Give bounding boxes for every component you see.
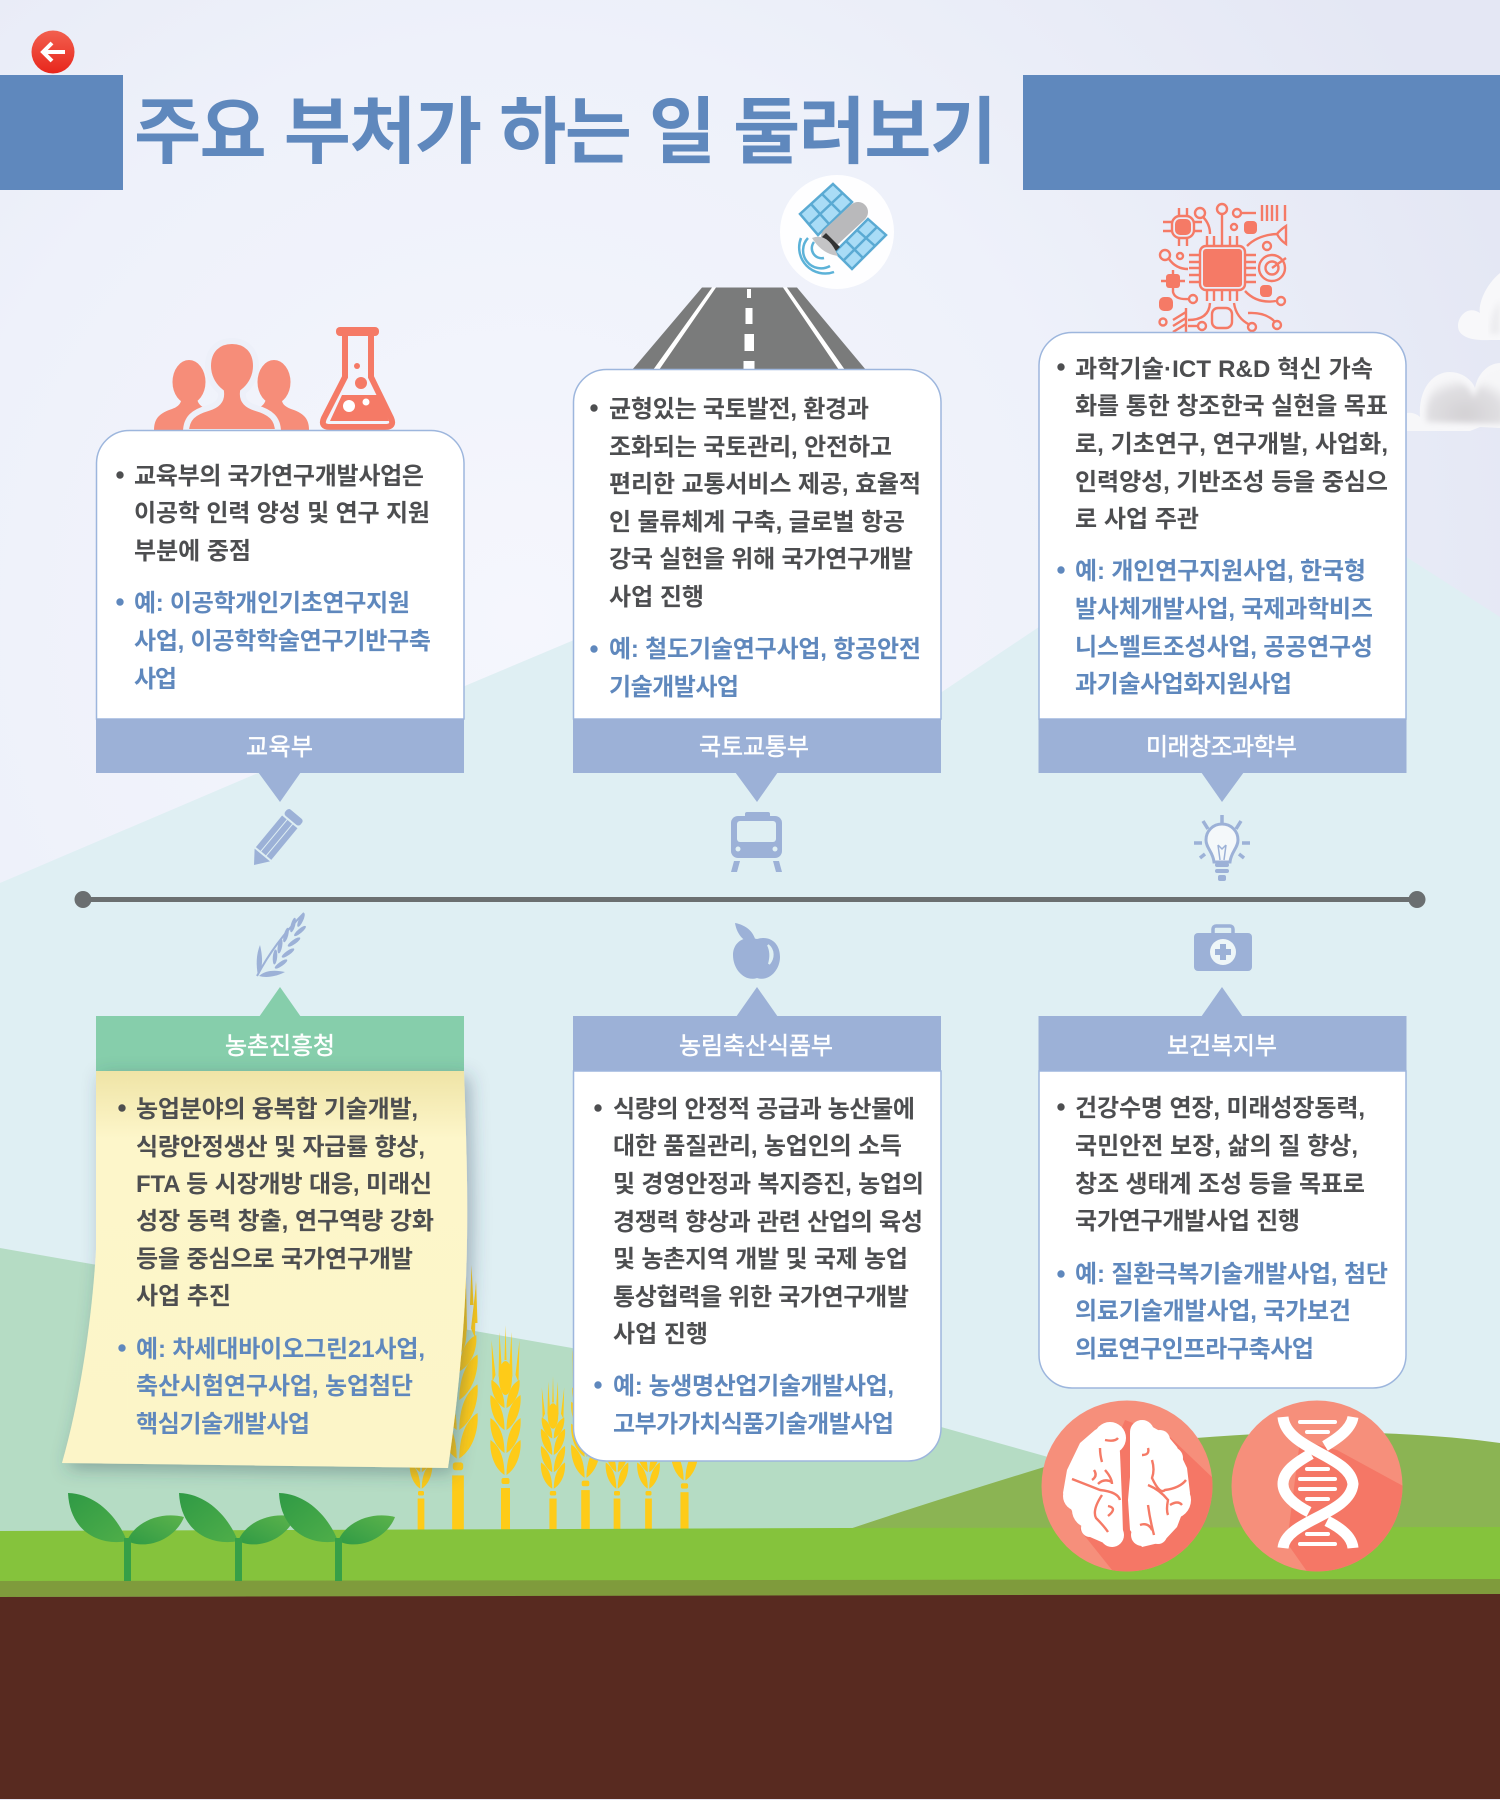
example <box>1057 1261 1388 1363</box>
description: 로, 기초연구, 연구개발, 사업화, <box>1075 431 1388 458</box>
pale blue mountains <box>0 471 1500 1600</box>
pale green hill <box>0 1248 1200 1535</box>
timeline axis <box>74 891 1426 908</box>
example: 고부가가치식품기술개발사업 <box>613 1411 894 1438</box>
description: 균형있는 국토발전, 환경과 <box>609 396 869 423</box>
icon: circuit chip <box>1159 204 1286 332</box>
example: 예: 질환극복기술개발사업, 첨단 <box>1075 1261 1388 1288</box>
example: 의료연구인프라구축사업 <box>1075 1336 1314 1363</box>
ministry label: 농촌진흥청 <box>225 1033 335 1060</box>
back button icon <box>32 30 74 74</box>
example: 의료기술개발사업, 국가보건 <box>1075 1298 1351 1325</box>
ministry label <box>573 987 941 1071</box>
icon: medical kit <box>1194 926 1252 971</box>
ministry label: 국토교통부 <box>699 734 809 761</box>
description: 식량안정생산 및 자급률 향상, <box>136 1134 425 1161</box>
ministry label <box>1038 719 1406 802</box>
example: 예: 이공학개인기초연구지원 <box>134 590 410 617</box>
example: 축산시험연구사업, 농업첨단 <box>136 1373 413 1400</box>
description: 인 물류체계 구축, 글로벌 항공 <box>609 509 905 536</box>
ground: grass <box>0 1527 1500 1582</box>
description: 과학기술·ICT R&D 혁신 가속 <box>1075 356 1373 383</box>
description: 사업 진행 <box>613 1321 708 1348</box>
olive hill <box>832 1432 1500 1540</box>
icon: light bulb <box>1194 815 1250 881</box>
icon: road <box>632 288 866 370</box>
example: 예: 개인연구지원사업, 한국형 <box>1075 558 1366 585</box>
panel: 농촌진흥청 <box>62 912 467 1468</box>
ministry label <box>573 719 941 802</box>
ministry label: 보건복지부 <box>1167 1033 1277 1060</box>
icon: dna <box>1232 1400 1402 1572</box>
ministry label: 농림축산식품부 <box>679 1033 833 1060</box>
description: 편리한 교통서비스 제공, 효율적 <box>609 471 921 498</box>
description: 화를 통한 창조한국 실현을 목표 <box>1075 393 1388 420</box>
description: 통상협력을 위한 국가연구개발 <box>613 1284 909 1311</box>
description: 및 경영안정과 복지증진, 농업의 <box>613 1171 924 1198</box>
description <box>590 396 921 611</box>
example: 과기술사업화지원사업 <box>1075 671 1292 698</box>
icon: flask <box>323 327 392 427</box>
description <box>116 463 430 565</box>
icon: pencil <box>246 808 304 871</box>
title banner <box>0 75 1500 190</box>
description: 사업 추진 <box>136 1283 231 1310</box>
description: 인력양성, 기반조성 등을 중심으 <box>1075 469 1388 496</box>
ministry label <box>1038 987 1406 1071</box>
icon: people <box>154 341 309 432</box>
description: 창조 생태계 조성 등을 목표로 <box>1075 1171 1365 1198</box>
example: 예: 차세대바이오그린21사업, <box>136 1336 425 1363</box>
ground: earth <box>0 1594 1500 1799</box>
ministry label <box>96 987 464 1071</box>
description <box>1057 356 1388 533</box>
panel: 교육부 <box>96 327 464 871</box>
seedlings <box>68 1493 395 1581</box>
description: 강국 실현을 위해 국가연구개발 <box>609 546 913 573</box>
ministry label: 교육부 <box>246 734 313 761</box>
description: 성장 동력 창출, 연구역량 강화 <box>136 1208 434 1235</box>
example <box>116 590 431 693</box>
card body <box>574 370 941 719</box>
icon: apple <box>733 923 780 979</box>
example <box>594 1373 894 1438</box>
description: 식량의 안정적 공급과 농산물에 <box>613 1096 915 1123</box>
example: 핵심기술개발사업 <box>136 1411 310 1438</box>
icon: satellite <box>780 175 894 289</box>
icon: brain <box>1042 1400 1215 1580</box>
description: 및 농촌지역 개발 및 국제 농업 <box>613 1246 908 1273</box>
panel: 보건복지부 <box>1038 926 1406 1388</box>
example: 사업 <box>134 666 177 693</box>
example: 기술개발사업 <box>609 674 739 701</box>
example: 예: 철도기술연구사업, 항공안전 <box>609 636 921 663</box>
example <box>118 1336 425 1438</box>
title: 주요 부처가 하는 일 둘러보기 <box>134 92 997 173</box>
panel: 국토교통부 <box>573 175 941 872</box>
ground: soil strip <box>0 1579 1500 1597</box>
description: 등을 중심으로 국가연구개발 <box>136 1246 413 1273</box>
card body <box>96 430 464 719</box>
panel: 미래창조과학부 <box>1038 204 1406 881</box>
description <box>118 1096 434 1310</box>
description: 로 사업 주관 <box>1075 506 1199 533</box>
description: 국민안전 보장, 삶의 질 향상, <box>1075 1133 1358 1160</box>
description <box>594 1096 924 1348</box>
card body <box>1039 1071 1406 1388</box>
example: 사업, 이공학학술연구기반구축 <box>134 628 431 655</box>
example <box>1057 558 1373 698</box>
wheat field <box>410 1264 698 1530</box>
ministry label: 미래창조과학부 <box>1146 734 1297 761</box>
description: 조화되는 국토관리, 안전하고 <box>609 434 892 461</box>
description <box>1057 1095 1365 1235</box>
panel: 농림축산식품부 <box>573 923 941 1461</box>
description: 경쟁력 향상과 관련 산업의 육성 <box>613 1209 923 1236</box>
card body <box>1039 332 1406 719</box>
example: 니스벨트조성사업, 공공연구성 <box>1075 634 1373 661</box>
description: 사업 진행 <box>609 584 704 611</box>
sticky note <box>62 1071 467 1468</box>
description: FTA 등 시장개방 대응, 미래신 <box>136 1171 432 1198</box>
icon: train <box>731 812 782 872</box>
description: 교육부의 국가연구개발사업은 <box>134 463 424 490</box>
description: 대한 품질관리, 농업인의 소득 <box>613 1133 902 1160</box>
card body <box>574 1071 941 1461</box>
ministry label <box>96 719 464 802</box>
description: 건강수명 연장, 미래성장동력, <box>1075 1095 1365 1122</box>
description: 이공학 인력 양성 및 연구 지원 <box>134 500 430 527</box>
example: 발사체개발사업, 국제과학비즈 <box>1075 596 1373 623</box>
description: 국가연구개발사업 진행 <box>1075 1208 1300 1235</box>
example: 예: 농생명산업기술개발사업, <box>613 1373 894 1400</box>
clouds <box>1407 273 1500 431</box>
description: 부분에 중점 <box>134 538 251 565</box>
icon: wheat <box>257 912 307 977</box>
example <box>590 636 921 701</box>
description: 농업분야의 융복합 기술개발, <box>136 1096 418 1123</box>
